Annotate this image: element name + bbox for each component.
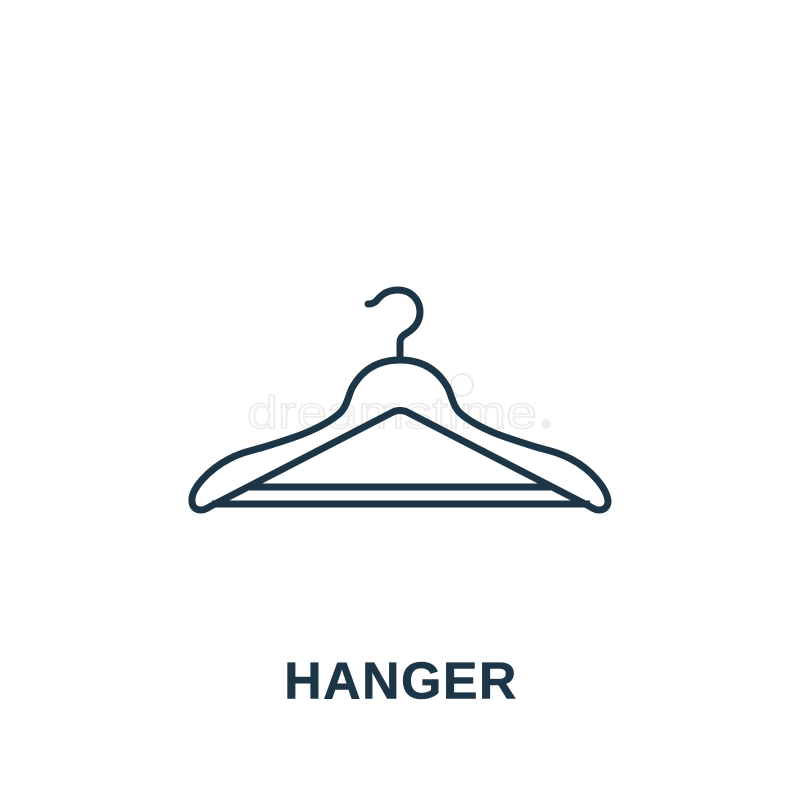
watermark — [247, 374, 551, 438]
upper bar — [247, 484, 553, 490]
watermark: dreamstime — [247, 387, 537, 438]
icon: hanger — [192, 290, 608, 510]
hook — [368, 290, 420, 360]
bottom bar — [212, 500, 590, 508]
title: HANGER — [284, 652, 518, 710]
hanger body outline — [192, 360, 608, 510]
